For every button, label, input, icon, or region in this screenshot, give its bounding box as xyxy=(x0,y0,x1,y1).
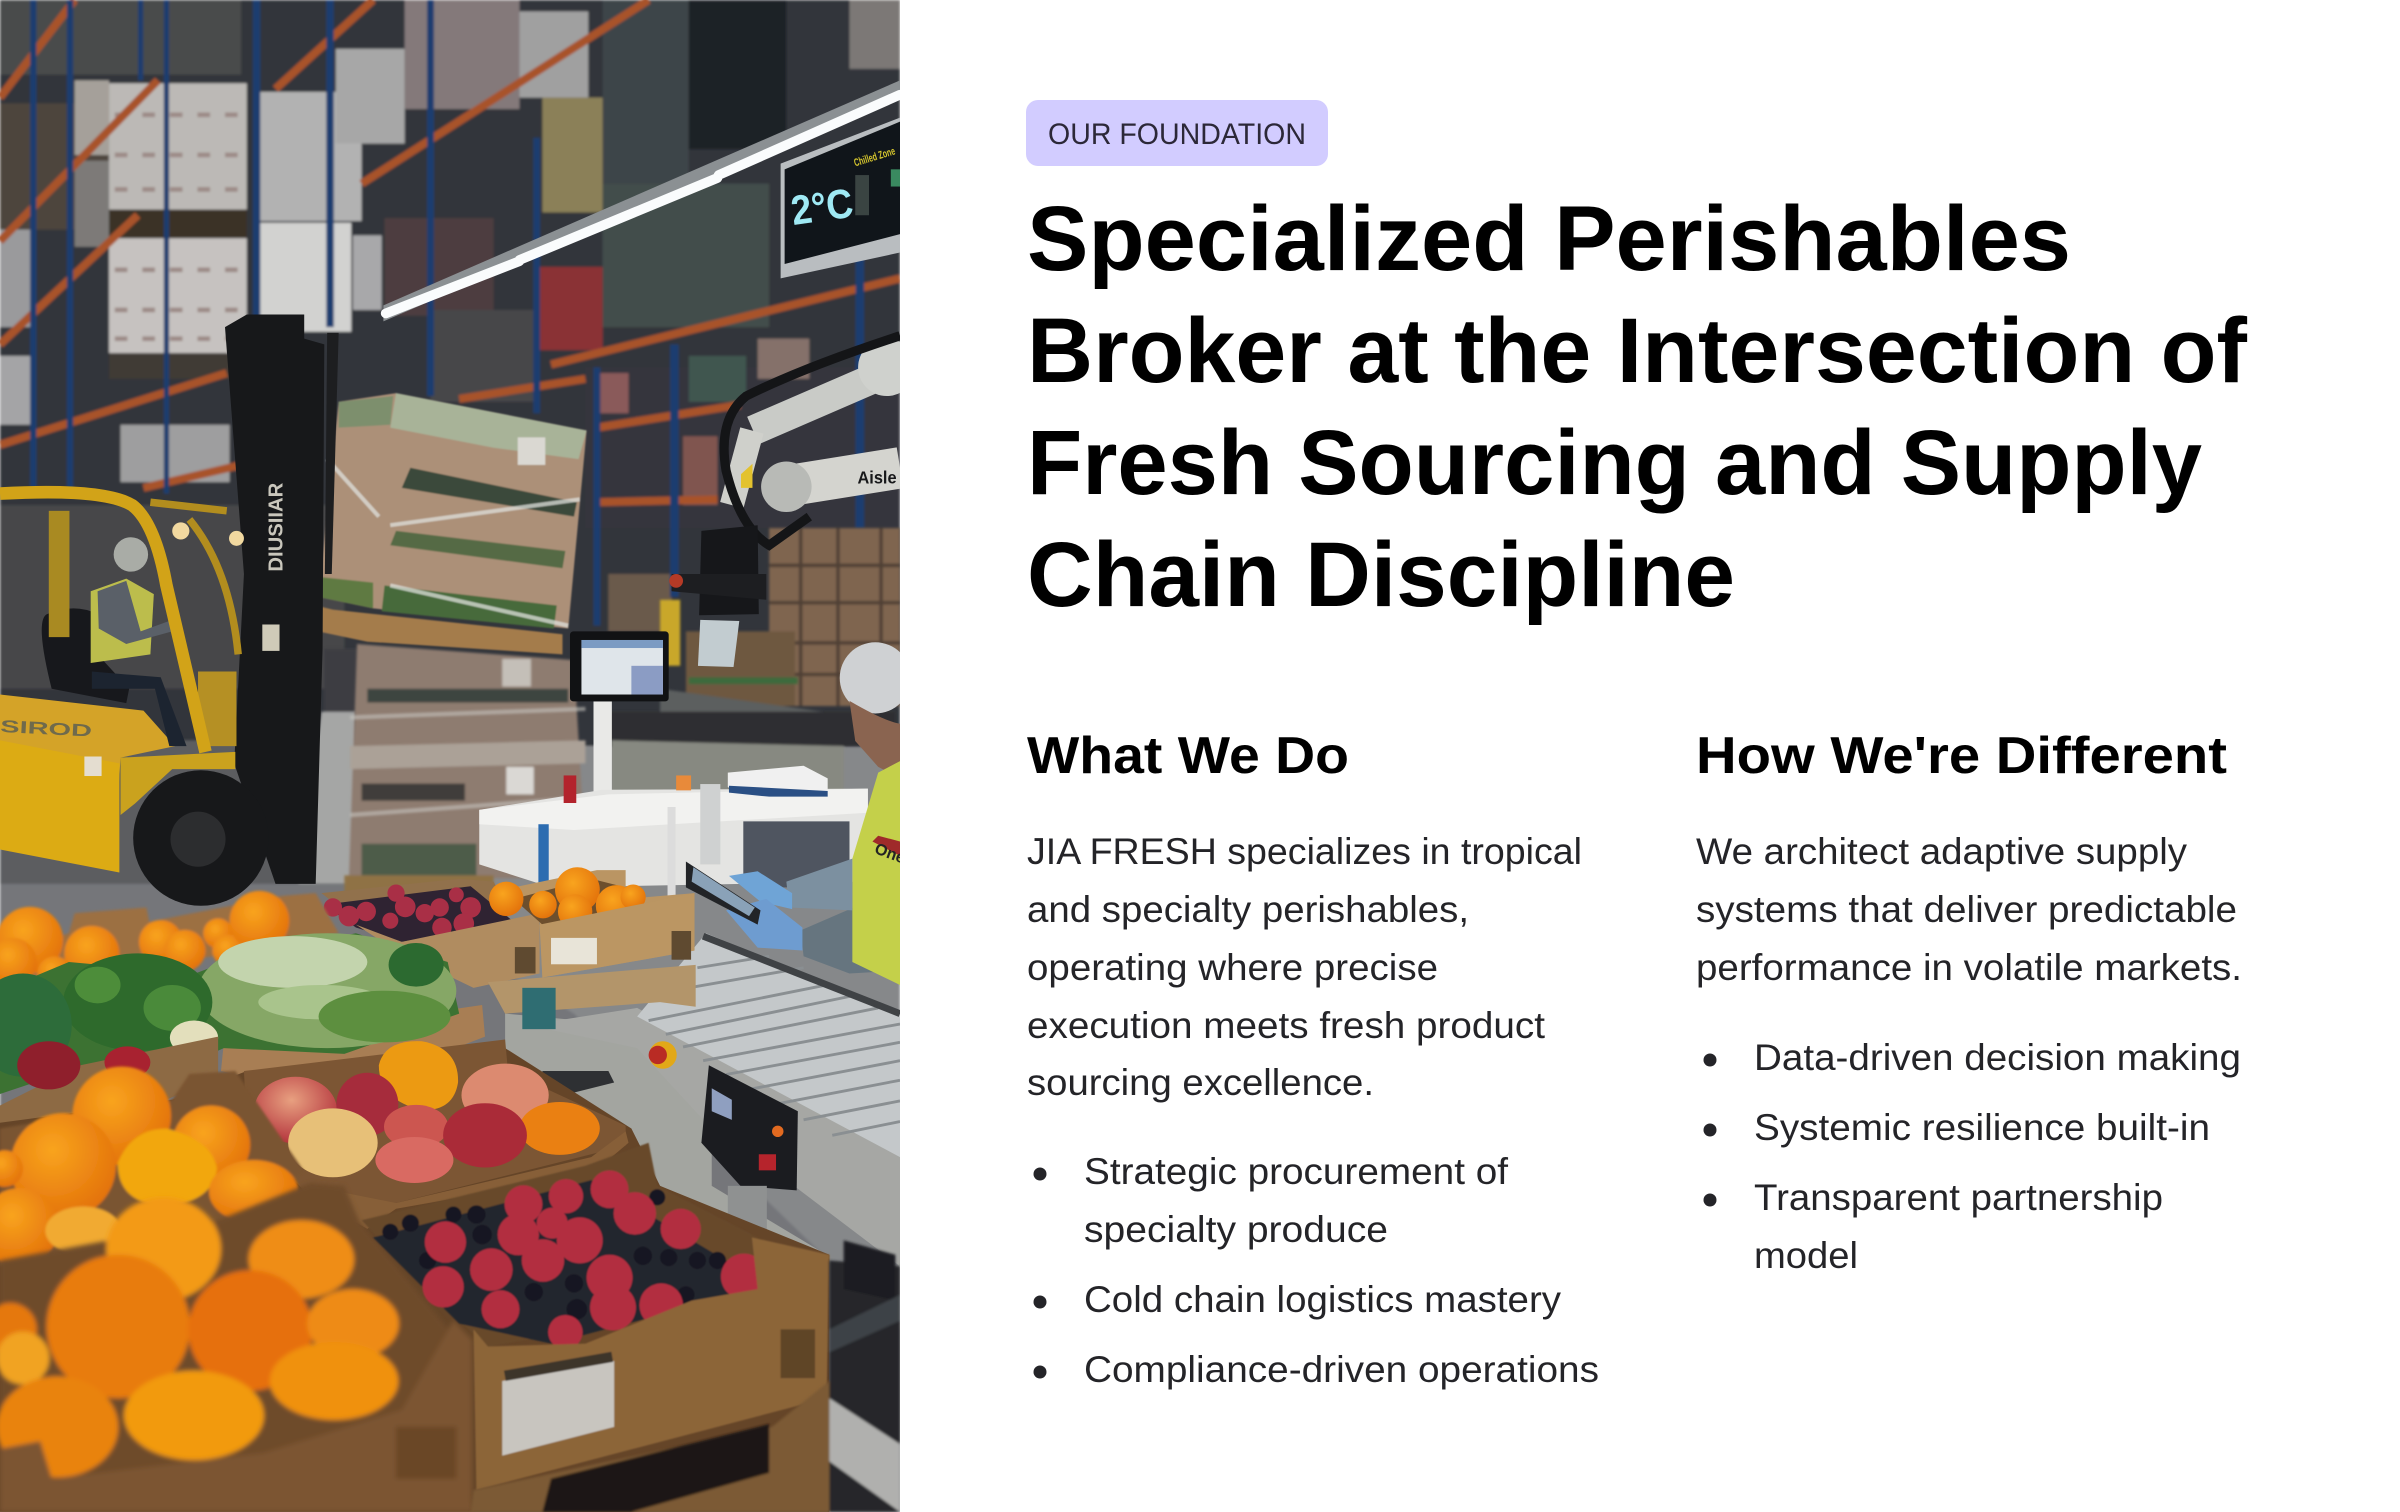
worker in hairnet xyxy=(686,642,911,985)
forklift mast xyxy=(225,315,339,884)
paragraph: what we do: sourcing excellence. xyxy=(1027,1062,1374,1103)
paragraph: how we're different: performance in volatile markets. xyxy=(1696,947,2242,988)
title: Fresh Sourcing and Supply xyxy=(1027,412,2202,514)
forklift mast: DIUSIIAR xyxy=(264,483,287,572)
middle crate of oranges xyxy=(0,1066,304,1266)
temperature display: 2°C xyxy=(788,180,856,234)
paragraph: how we're different: systems that deliver predictable xyxy=(1696,889,2237,930)
far background boxes xyxy=(298,528,900,884)
paragraph: how we're different: We architect adaptive supply xyxy=(1696,831,2188,872)
back left crate of oranges xyxy=(0,889,339,980)
conveyor xyxy=(566,933,900,1266)
foreground floor xyxy=(505,1014,827,1266)
paragraph: what we do xyxy=(1027,831,1582,1103)
robotic arm xyxy=(669,336,915,667)
bullet list: what we do xyxy=(1034,1151,1599,1390)
bullet list: what we do: specialty produce xyxy=(1084,1209,1388,1250)
paragraph: how we're different xyxy=(1696,831,2242,988)
back crate: berries xyxy=(321,870,695,988)
forklift and driver: SIROD xyxy=(0,716,93,741)
control panel xyxy=(701,1065,798,1243)
bullet list: how we're different: Data-driven decision making xyxy=(1754,1037,2241,1078)
paragraph: what we do: operating where precise xyxy=(1027,947,1438,988)
worker in hairnet: One xyxy=(872,840,908,867)
bullet list: how we're different xyxy=(1704,1037,2241,1276)
paragraph: what we do: and specialty perishables, xyxy=(1027,889,1469,930)
temperature display: Chilled Zone xyxy=(853,145,897,169)
front left crate of oranges xyxy=(0,1183,474,1512)
warehouse racks background xyxy=(0,0,900,1512)
lower wrapped pallet stack xyxy=(344,644,587,900)
wrapped pallet of produce xyxy=(304,393,587,654)
bullet list: what we do: Compliance-driven operations xyxy=(1084,1349,1599,1390)
panel: warehouse photo xyxy=(0,0,915,1512)
title: Broker at the Intersection of xyxy=(1027,300,2247,402)
paragraph: what we do: JIA FRESH specializes in tropical xyxy=(1027,831,1582,872)
title: Chain Discipline xyxy=(1027,524,1735,626)
temperature display xyxy=(781,118,900,278)
touchscreen monitor on stand xyxy=(570,631,669,799)
crate of apples and peppers xyxy=(244,1039,629,1229)
bullet list: how we're different: Systemic resilience built-in xyxy=(1754,1107,2210,1148)
leafy greens crate xyxy=(0,933,485,1128)
badge: our foundation: OUR FOUNDATION xyxy=(1048,118,1306,151)
robotic arm: Aisle xyxy=(858,467,897,487)
ceiling light strip xyxy=(383,80,900,321)
heading: what we do: What We Do xyxy=(1027,727,1349,785)
bullet list: how we're different: Transparent partnership xyxy=(1754,1177,2163,1218)
packing station xyxy=(479,766,868,905)
badge: our foundation xyxy=(1026,100,1328,166)
forklift and driver xyxy=(0,492,269,906)
front berry crate xyxy=(362,1143,829,1490)
back crate: oranges xyxy=(488,867,696,1029)
lower crate and dark floor at right xyxy=(471,1240,900,1512)
heading: how we're different: How We're Different xyxy=(1696,727,2227,785)
produce crates base xyxy=(0,1048,829,1512)
bullet list: what we do: Strategic procurement of xyxy=(1084,1151,1509,1192)
title xyxy=(1027,188,2247,626)
bullet list: what we do: Cold chain logistics mastery xyxy=(1084,1279,1562,1320)
column: how we're different xyxy=(1696,727,2242,1276)
bullet list: how we're different: model xyxy=(1754,1235,1858,1276)
column: what we do xyxy=(1027,727,1599,1390)
title: Specialized Perishables xyxy=(1027,188,2071,290)
paragraph: what we do: execution meets fresh product xyxy=(1027,1005,1546,1046)
